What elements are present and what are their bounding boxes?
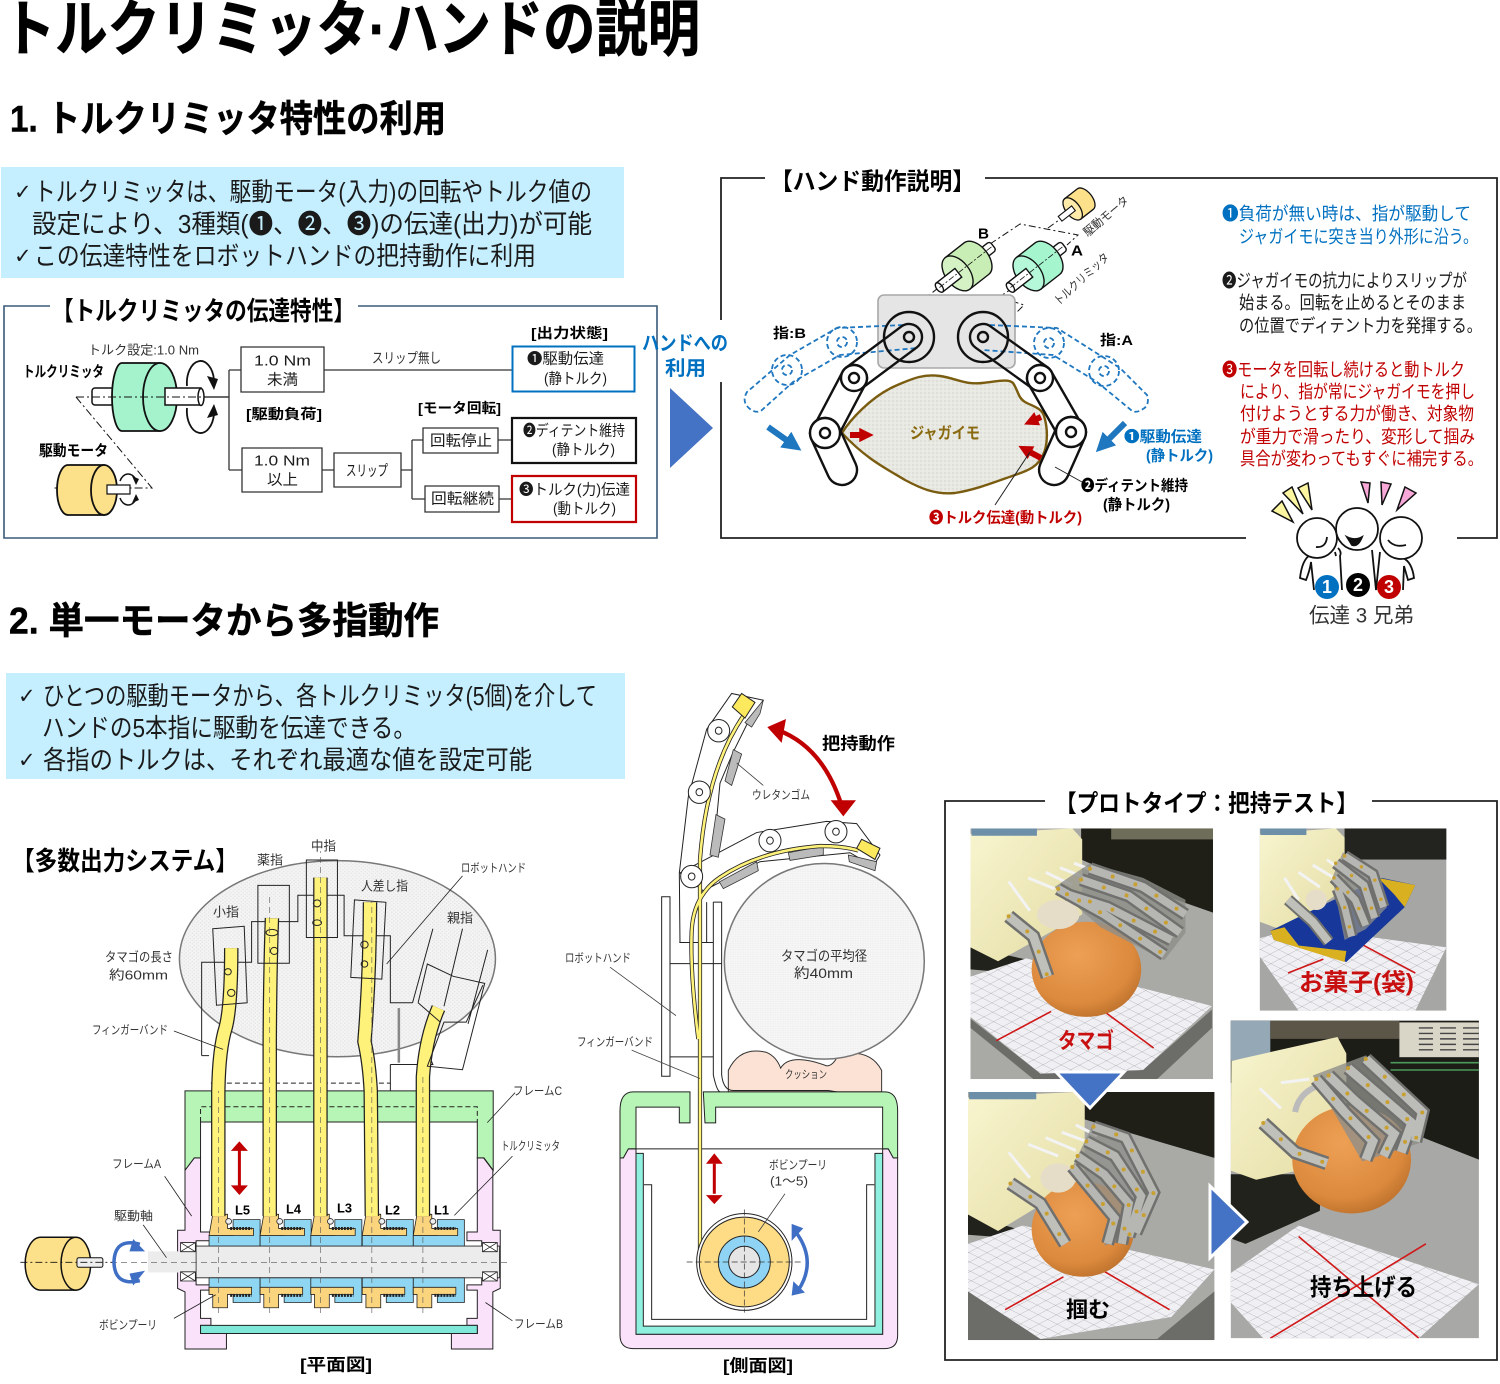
box: output 3: ❸トルク(力)伝達 (519, 482, 630, 498)
fingers: closed position (805, 312, 1091, 490)
units (181, 1214, 497, 1308)
plan view labels: フレームA (112, 1157, 161, 1171)
labels: torque limiter and motor: トルクリミッタ (23, 364, 104, 380)
photo captions (1058, 970, 1417, 1322)
arrows: drive direction (768, 423, 1125, 444)
callout: section 1 summary: ✓ (14, 180, 32, 204)
box: output 2 (512, 418, 636, 463)
heading: prototype: 【プロトタイプ：把持テスト】 (1055, 790, 1358, 818)
arrow: use for hand: ハンドへの (642, 333, 728, 355)
plan view labels: ロボットハンド (461, 861, 526, 875)
callout: section 2 summary: ひとつの駆動モータから、各トルクリミッタ(5個)を介して (43, 681, 597, 711)
callout: section 2 summary: ✓ (18, 748, 36, 772)
leader lines and labels: ❷ディテント維持 (1081, 476, 1188, 494)
callout: section 1 summary: トルクリミッタは、駆動モータ(入力)の回転やトルク値の (34, 177, 592, 207)
box: output 3: (動トルク) (553, 500, 616, 518)
icon: motor and torque limiters (909, 185, 1132, 337)
plan view labels: フレームB (514, 1317, 563, 1331)
box: slip (334, 453, 401, 487)
labels: torque limiter and motor: 駆動モータ (39, 442, 108, 460)
side view labels: [側面図] (723, 1356, 793, 1376)
flow labels (246, 325, 608, 422)
leader lines (610, 763, 785, 1232)
plan view labels: フィンガーバンド (92, 1023, 168, 1037)
box: under 1.0 Nm (241, 347, 324, 392)
box: rotation continue: 回転継続 (431, 490, 494, 508)
photo captions: タマゴ (1058, 1028, 1114, 1054)
palm (662, 897, 837, 1092)
callout: section 1 summary: ✓ (14, 244, 32, 268)
photo captions: お菓子(袋) (1299, 970, 1414, 996)
side view labels: ロボットハンド (565, 951, 631, 965)
side view labels: タマゴの平均径 (781, 948, 867, 964)
box: 1.0 Nm or more: 以上 (267, 472, 298, 488)
finger bands (691, 716, 858, 1254)
pink lower frame (620, 1149, 898, 1349)
icon: motor and torque limiters: トルクリミッタ (1051, 250, 1112, 308)
box: output 1: ❶駆動伝達 (527, 350, 604, 368)
box: output 1: (静トルク) (544, 370, 607, 388)
icon: motor and torque limiters: B (978, 226, 989, 242)
frame C (185, 1091, 493, 1170)
palm outline (202, 895, 433, 1091)
heading: hand motion: 【ハンド動作説明】 (770, 168, 975, 196)
heading: multi-output system: 【多数出力システム】 (12, 846, 238, 876)
teal bar (201, 1325, 477, 1334)
plan view labels: フレームC (513, 1084, 562, 1098)
blue rotation arrow (792, 1224, 807, 1296)
box: rotation stop (423, 428, 498, 453)
red motion arrow (706, 1153, 723, 1204)
side view labels: クッション (785, 1068, 827, 1081)
finger bands (218, 878, 438, 1216)
box: under 1.0 Nm: 未満 (267, 372, 298, 388)
side view labels (565, 734, 895, 1376)
diagram: plan view (20, 838, 563, 1374)
heading: section 2: 2. 単一モータから多指動作 (9, 600, 439, 642)
leader lines and labels: 指:A (1100, 332, 1133, 348)
grip arrow (767, 719, 856, 816)
illustration: three brothers: 3 (1384, 577, 1394, 597)
box: 1.0 Nm or more (242, 448, 322, 492)
frame B and A (178, 1158, 500, 1349)
arrows: torque on potato (850, 417, 1041, 458)
fingers (679, 693, 763, 942)
panel: prototype grasp test (945, 790, 1497, 1360)
leader lines (143, 876, 515, 1321)
panel: hand motion explanation (721, 168, 1497, 538)
leader lines and labels: 指:B (773, 325, 806, 341)
side view labels: 約40mm (794, 965, 853, 981)
box: output 1 (512, 346, 634, 392)
illustration: three brothers (1272, 482, 1422, 628)
cylinder A (996, 230, 1076, 305)
labels: torque limiter and motor (23, 342, 199, 460)
flow labels: [出力状態] (531, 325, 608, 341)
flow labels: スリップ無し (372, 350, 441, 366)
explanation text 1 (1222, 204, 1478, 247)
heading: transmission characteristics: 【トルクリミッタの伝達特性】 (52, 296, 355, 326)
side view labels: フィンガーバンド (577, 1035, 653, 1049)
leader lines and labels: (静トルク) (1146, 446, 1213, 464)
motor (1052, 185, 1099, 229)
plan view labels (92, 838, 563, 1374)
object: potato (842, 375, 1047, 493)
box: slip: スリップ (346, 462, 388, 480)
box: rotation stop: 回転停止 (430, 432, 492, 450)
icon: torque limiter cylinder (52, 361, 229, 488)
box: output 2: ❷ディテント維持 (523, 422, 625, 440)
fingertips (732, 693, 880, 859)
explanation text 2 (1222, 271, 1482, 336)
photo captions: 掴む (1066, 1298, 1110, 1322)
plan view labels: 人差し指 (361, 878, 408, 894)
panel: torque limiter transmission characteristics (4, 296, 657, 538)
diagram: side view (565, 693, 924, 1376)
box: output 3 (512, 476, 636, 522)
plan view labels: L3 (337, 1200, 352, 1216)
box: under 1.0 Nm: 1.0 Nm (254, 352, 311, 370)
axis lines (111, 851, 511, 1313)
plan view labels: トルクリミッタ (501, 1139, 560, 1153)
finger: open position dashed (745, 325, 1148, 412)
photo: snack bag (1260, 828, 1446, 1011)
arrow: grasp to lift (1210, 1186, 1247, 1258)
arrow: use for hand (642, 333, 728, 468)
explanation text 1: ❶負荷が無い時は、指が駆動して (1222, 204, 1471, 224)
rotation arrow (114, 1239, 145, 1286)
callout: section 2 summary (6, 673, 625, 779)
plan view labels: ボビンプーリ (99, 1318, 157, 1332)
plan view labels: L1 (434, 1202, 449, 1218)
egg (724, 864, 924, 1059)
arrow: use for hand: 利用 (665, 357, 706, 380)
flow labels: [モータ回転] (418, 400, 501, 416)
side view labels: ボビンプーリ (769, 1158, 827, 1172)
plan view labels: 薬指 (257, 852, 283, 868)
green top frame (620, 1092, 898, 1158)
plan view labels: 親指 (447, 910, 473, 926)
egg outline (179, 861, 495, 1057)
cushion (728, 1051, 882, 1092)
shaft (148, 1246, 500, 1278)
callout: section 2 summary: 各指のトルクは、それぞれ最適な値を設定可能 (43, 745, 532, 775)
illustration: three brothers: 伝達 3 兄弟 (1309, 604, 1414, 628)
flow labels: [駆動負荷] (246, 406, 322, 422)
cylinder B (925, 230, 1005, 305)
photo: lifting egg (1231, 1021, 1479, 1338)
callout: section 1 summary (1, 167, 624, 278)
base plate (878, 295, 1015, 368)
box: rotation continue (425, 486, 499, 512)
motor (20, 1237, 115, 1290)
leader lines and labels (773, 325, 1213, 526)
icon: motor and torque limiters: 駆動モータ (1081, 193, 1132, 239)
box: 1.0 Nm or more: 1.0 Nm (254, 452, 310, 470)
plan view labels: タマゴの長さ (105, 950, 173, 964)
motion arrow (231, 1141, 248, 1195)
plan view labels: 駆動軸 (114, 1209, 153, 1223)
plan view labels: [平面図] (300, 1356, 372, 1374)
leader lines and labels: (静トルク) (1103, 496, 1170, 514)
side view labels: (1〜5) (770, 1174, 808, 1188)
joints (681, 719, 847, 888)
callout: section 1 summary: 設定により、3種類(❶、❷、❸)の伝達(出力)が可能 (32, 209, 592, 239)
heading: section 1: 1. トルクリミッタ特性の利用 (10, 98, 446, 140)
plan view labels: 小指 (213, 904, 239, 920)
bobbin pulley (687, 1209, 803, 1313)
photo captions: 持ち上げる (1310, 1274, 1417, 1302)
callout: section 2 summary: ハンドの5本指に駆動を伝達できる。 (42, 713, 416, 743)
icon: motor and torque limiters: A (1071, 242, 1083, 260)
arrow: egg to grasp (1056, 1072, 1124, 1108)
leader lines and labels: ❸トルク伝達(動トルク) (929, 510, 1082, 526)
side view labels: ウレタンゴム (752, 787, 810, 802)
labels: torque limiter and motor: トルク設定:1.0 Nm (88, 342, 199, 358)
teal channel (636, 1153, 883, 1334)
photo: egg (970, 828, 1213, 1079)
callout: section 2 summary: ✓ (18, 684, 36, 708)
finger frames (213, 860, 488, 1070)
box: output 2: (静トルク) (552, 442, 615, 458)
plan view labels: 約60mm (109, 968, 168, 982)
photo: grasping egg (968, 1092, 1214, 1340)
object: potato: ジャガイモ (910, 424, 980, 442)
plan view labels: L4 (286, 1202, 302, 1216)
urethane pads (710, 700, 877, 889)
illustration: three brothers: 1 (1322, 577, 1332, 597)
plan view labels: 中指 (311, 838, 336, 854)
side view labels: 把持動作 (822, 734, 895, 754)
flow chart (229, 325, 636, 522)
leader lines and labels: ❶駆動伝達 (1124, 428, 1202, 446)
explanation text 3 (1222, 360, 1483, 469)
illustration: three brothers: 2 (1353, 575, 1363, 595)
icon: drive motor (57, 465, 139, 515)
callout: section 1 summary: この伝達特性をロボットハンドの把持動作に利用 (34, 241, 536, 271)
plan view labels: L5 (235, 1202, 250, 1218)
plan view labels: L2 (385, 1202, 400, 1218)
